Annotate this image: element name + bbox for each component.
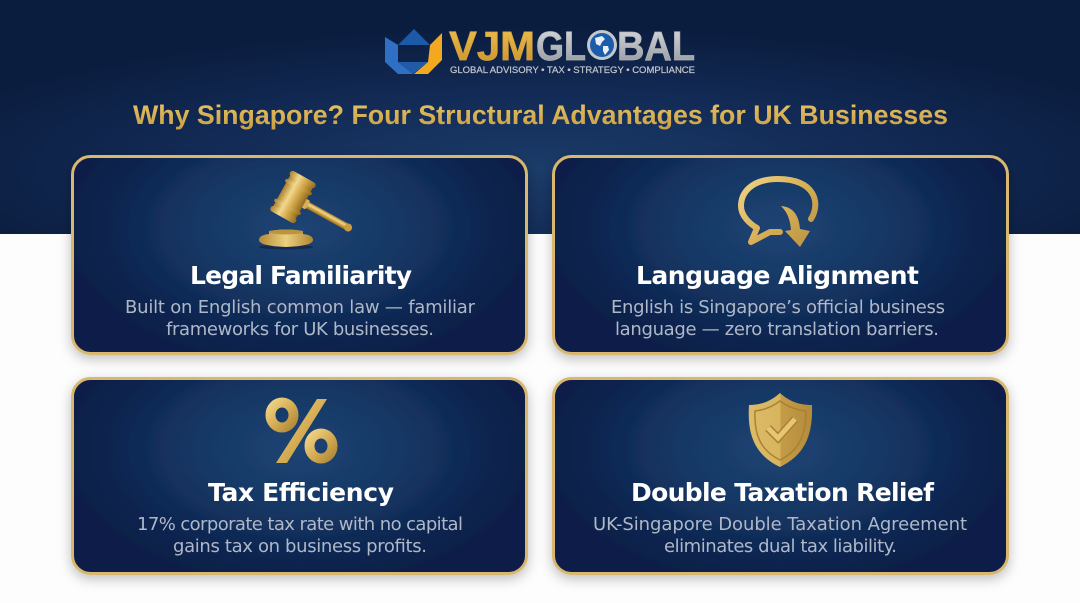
card heading: Language Alignment — [636, 261, 919, 290]
logo wordmark: GL — [536, 23, 586, 69]
card description — [611, 297, 945, 340]
logo: VJM Global — [385, 23, 695, 76]
panel: language alignment — [554, 156, 1008, 354]
icon: globe — [587, 30, 617, 60]
card description — [593, 514, 967, 557]
card heading: Double Taxation Relief — [631, 478, 935, 507]
card description: eliminates dual tax liability. — [664, 536, 897, 557]
header background band — [0, 0, 1080, 234]
logo wordmark: BAL — [617, 23, 695, 69]
panel: tax efficiency — [72, 378, 526, 574]
logo wordmark — [449, 23, 695, 69]
title: Why Singapore? Four Structural Advantages for UK Businesses — [133, 100, 948, 130]
logo wordmark: VJM — [449, 23, 535, 69]
icon: speech bubble with arrow — [741, 179, 815, 247]
card description: frameworks for UK businesses. — [166, 319, 434, 340]
panel: double taxation relief — [554, 378, 1008, 574]
card heading: Legal Familiarity — [190, 261, 412, 290]
card description: language — zero translation barriers. — [615, 319, 939, 340]
card description: Built on English common law — familiar — [125, 297, 476, 318]
card heading: Tax Efficiency — [208, 478, 394, 507]
icon: gavel — [259, 170, 363, 250]
panel: legal familiarity — [72, 156, 526, 354]
icon: shield with check — [749, 393, 812, 467]
icon: logo mark — [385, 29, 442, 74]
card description — [137, 514, 463, 557]
card description — [125, 297, 476, 340]
card description: English is Singapore’s official business — [611, 297, 945, 318]
icon: percent sign — [270, 399, 332, 463]
card description: gains tax on business profits. — [173, 536, 427, 557]
card description: UK-Singapore Double Taxation Agreement — [593, 514, 967, 535]
logo tagline: GLOBAL ADVISORY • TAX • STRATEGY • COMPLIANCE — [450, 65, 695, 76]
card description: 17% corporate tax rate with no capital — [137, 514, 463, 535]
